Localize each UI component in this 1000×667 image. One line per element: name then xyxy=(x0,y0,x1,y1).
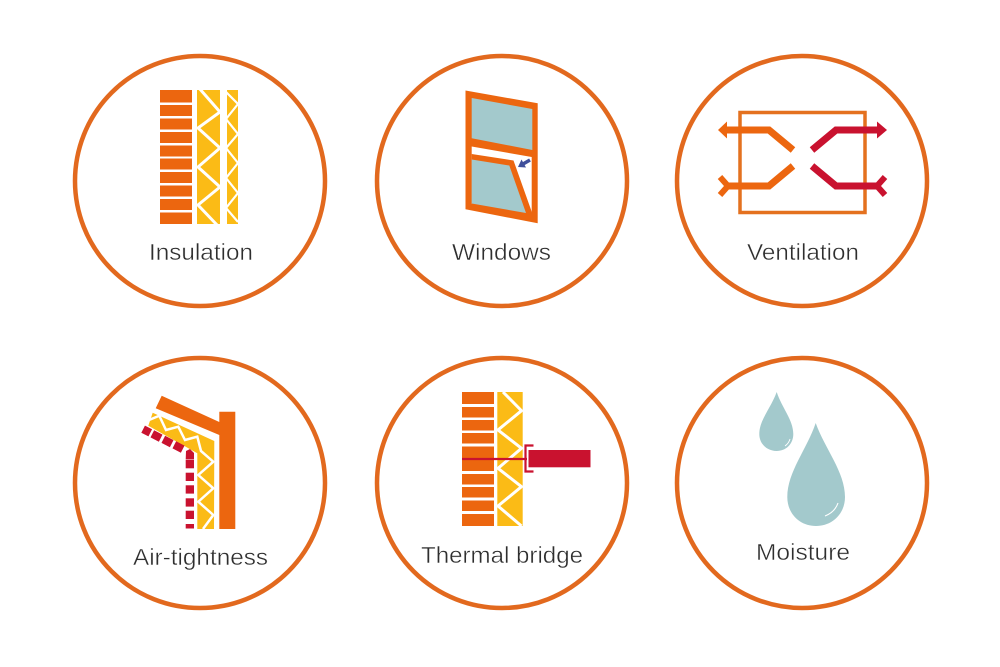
label: insulation: Insulation xyxy=(149,239,253,265)
label: air-tightness: Air-tightness xyxy=(133,544,268,570)
icon: tilting window xyxy=(466,90,538,223)
label: moisture: Moisture xyxy=(756,539,850,565)
icon: water drops xyxy=(759,392,845,526)
panel: air-tightness xyxy=(75,358,325,608)
panel: ventilation xyxy=(677,56,927,306)
panel: moisture xyxy=(677,358,927,608)
moisture ring xyxy=(677,358,927,608)
icon: heat exchanger xyxy=(718,112,887,212)
icon: thermal bridge wall xyxy=(462,392,590,526)
panel: windows xyxy=(377,56,627,306)
label: thermal bridge: Thermal bridge xyxy=(421,542,583,568)
label: windows: Windows xyxy=(452,239,551,265)
panel: insulation xyxy=(75,56,325,306)
thermal bridge ring xyxy=(377,358,627,608)
ventilation ring xyxy=(677,56,927,306)
panel: thermal bridge xyxy=(377,358,627,608)
air-tightness ring xyxy=(75,358,325,608)
windows ring xyxy=(377,56,627,306)
icon: airtight roof junction xyxy=(141,396,235,529)
icon: insulated wall xyxy=(160,88,238,226)
label: ventilation: Ventilation xyxy=(747,239,859,265)
insulation ring xyxy=(75,56,325,306)
